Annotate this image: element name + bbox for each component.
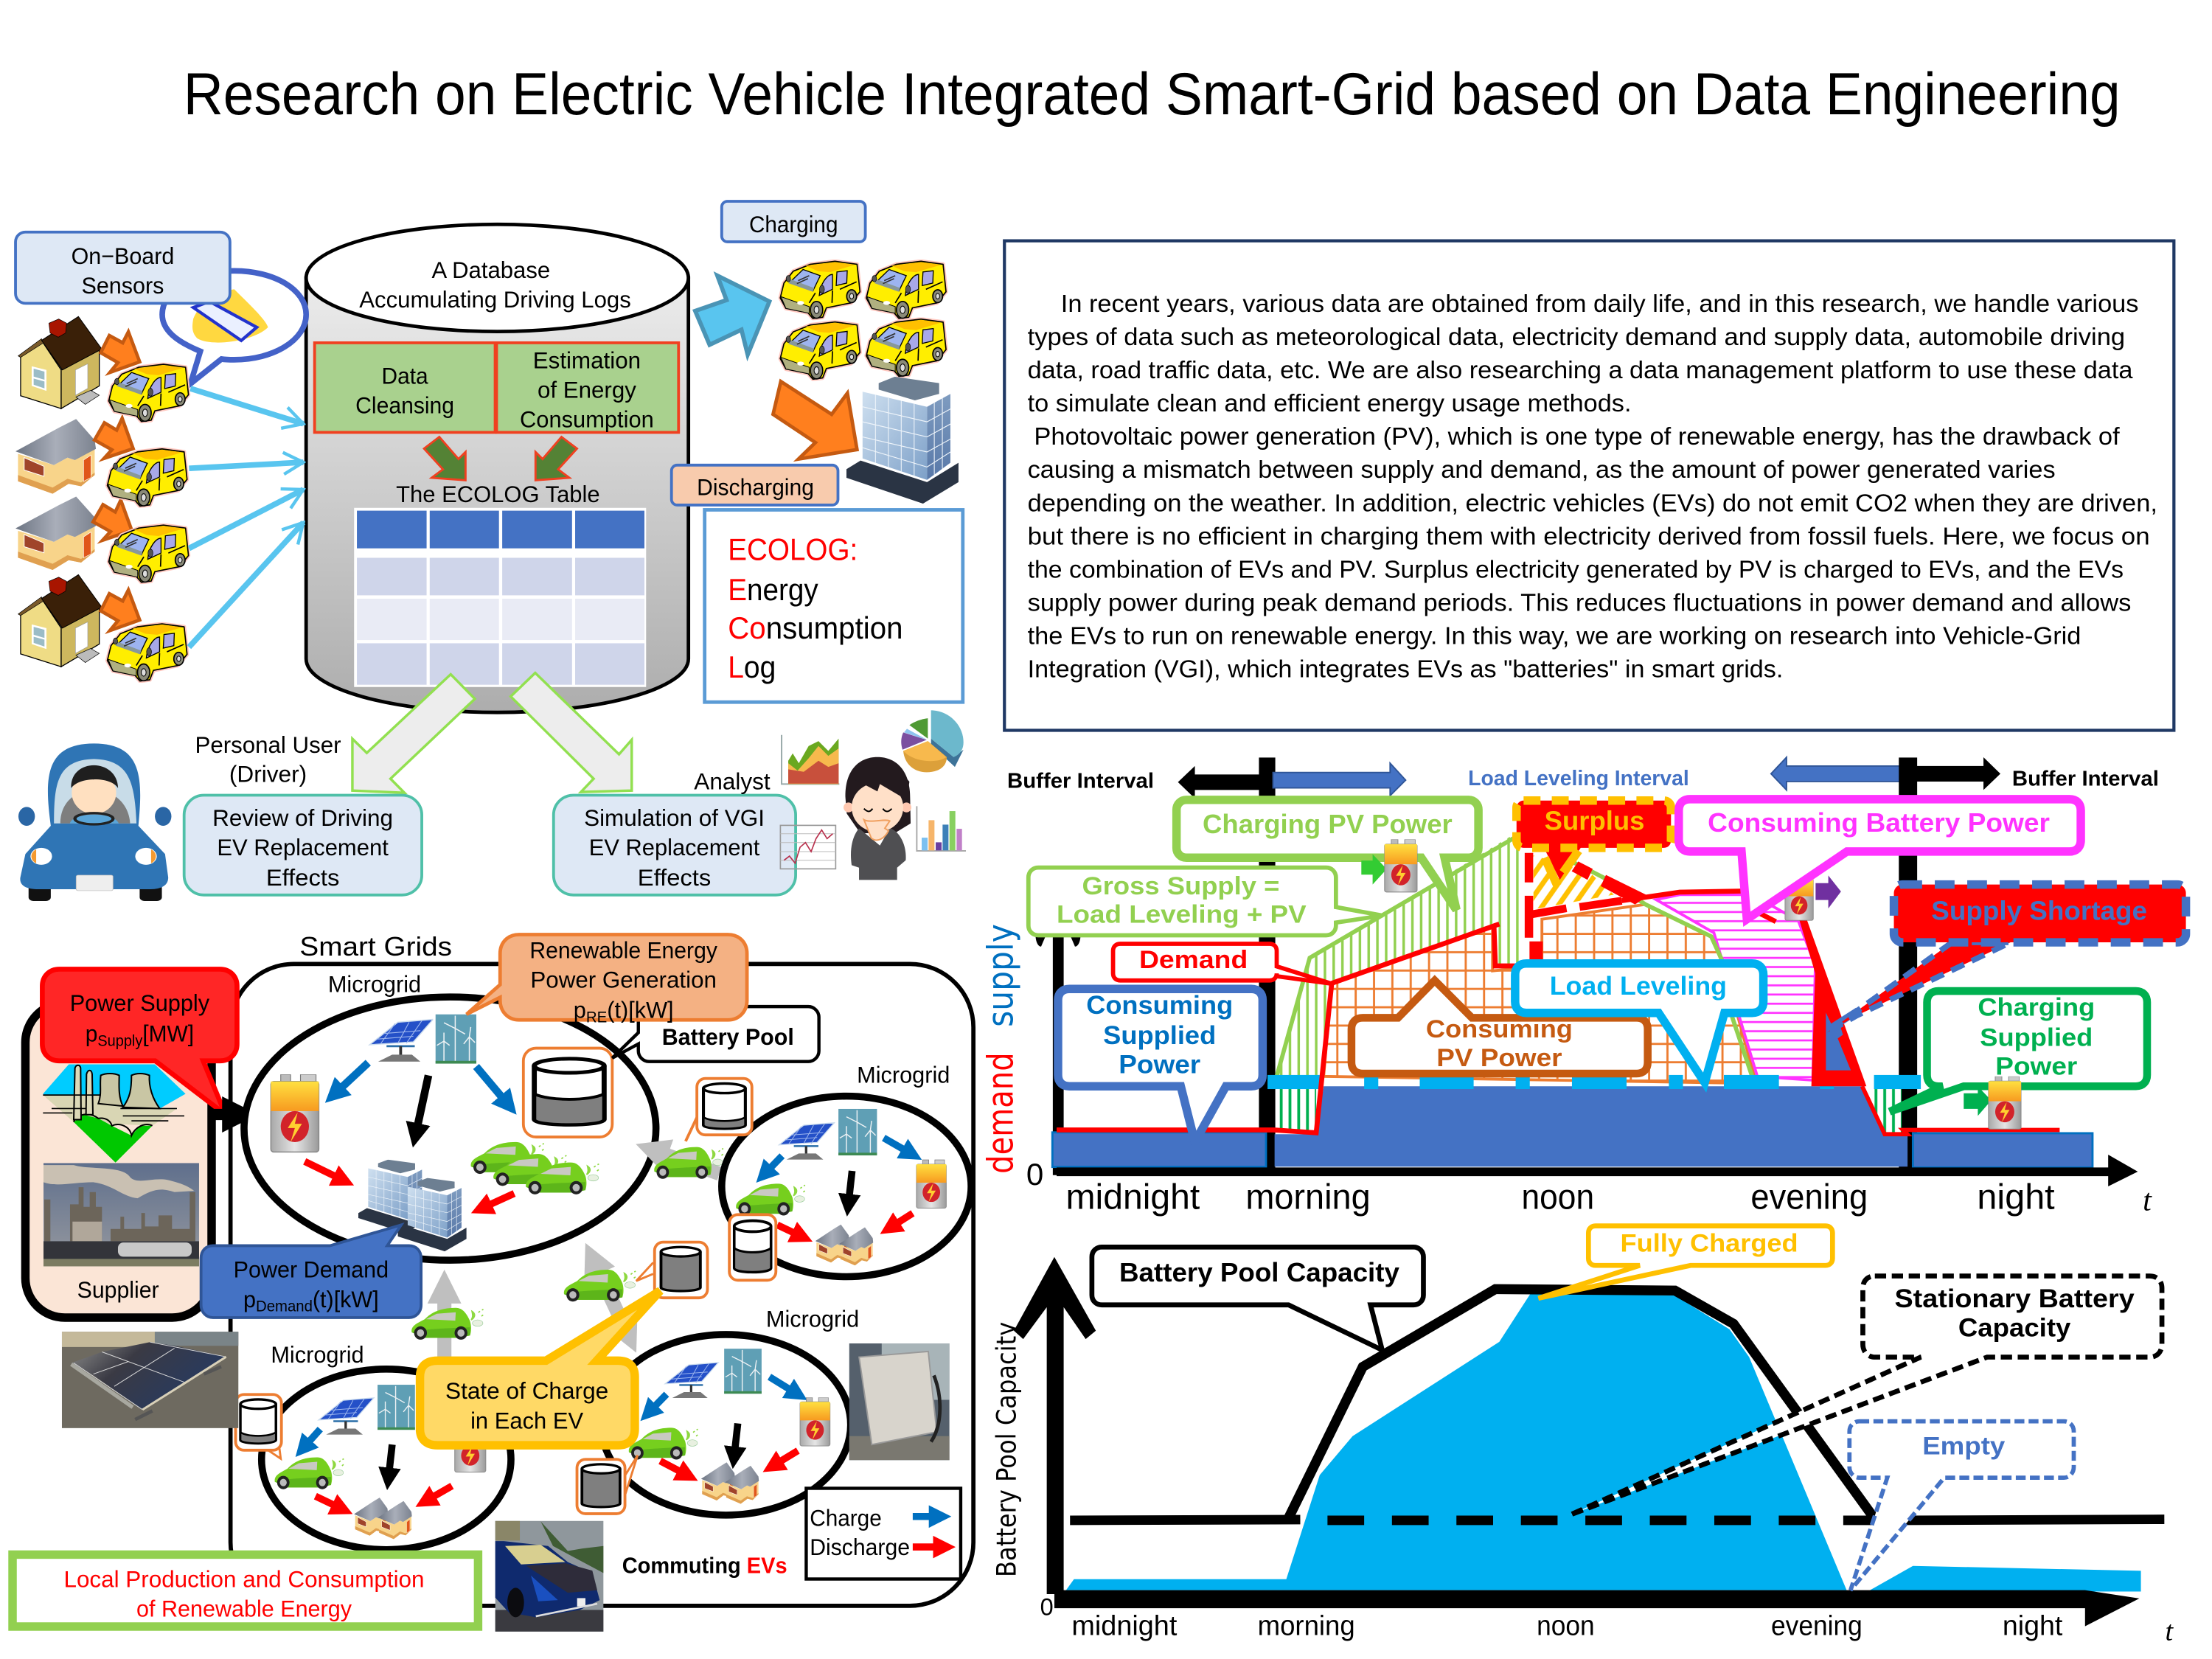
chart area: state of charge (1066, 1293, 2141, 1592)
box: estimation of energy consumption (496, 343, 678, 433)
callout: battery pool capacity (1092, 1247, 1423, 1350)
box: estimation of energy consumption: of Energy (538, 377, 636, 403)
icon: charging van 4 (866, 319, 946, 376)
axis tick labels: night (1977, 1178, 2055, 1217)
callout: stationary battery capacity: Stationary Battery (1895, 1284, 2135, 1313)
icon: commuting EV 3 (654, 1147, 723, 1179)
label: charging: Charging (749, 211, 838, 237)
panel: research summary: but there is no efficient in charging them with electricity derived from fossil fuels. Here, we focus on (1028, 523, 2150, 550)
callout: battery pool (612, 1006, 819, 1062)
photo: commuting EV (495, 1521, 603, 1632)
axis tick labels: noon (1537, 1610, 1595, 1641)
callout: charging supplied power: Charging (1978, 994, 2095, 1022)
axis tick labels (1026, 1157, 2152, 1218)
chart area: evening charging stripes (1870, 1089, 1902, 1133)
icon: house 4 (18, 574, 102, 667)
axis tick labels: evening (1771, 1610, 1863, 1641)
chart area: PV charging hatch (1277, 834, 1523, 1077)
chart area: morning charging stripes (1277, 1089, 1316, 1133)
axis tick labels: evening (1750, 1178, 1868, 1217)
icon: analyst woman (844, 757, 911, 880)
callout: surplus: Surplus (1545, 806, 1644, 836)
callout: supply shortage: Supply Shortage (1931, 895, 2147, 925)
panel: research summary: supply power during peak demand periods. This reduces fluctuations in power demand and allows (1028, 589, 2131, 616)
label: on-board sensors: Sensors (81, 272, 164, 299)
legend: charge and discharge: Discharge (810, 1534, 910, 1560)
label: discharging (672, 465, 838, 505)
arrow: commuting EV 2 path (593, 1259, 629, 1338)
callout: battery pool capacity: Battery Pool Capacity (1119, 1257, 1400, 1287)
panel: research summary: to simulate clean and efficient energy usage methods. (1028, 390, 1631, 417)
axis tick labels: t (2166, 1615, 2174, 1646)
legend box: ECOLOG definition: ECOLOG: (728, 532, 858, 567)
callout: charging supplied power: Power (1995, 1053, 2077, 1081)
icon: commuting EV 2 (564, 1270, 636, 1301)
icon: house 1 (18, 316, 102, 408)
callout: local production and consumption (13, 1554, 478, 1627)
callout: power demand: p (243, 1286, 257, 1312)
axis: horizontal (1054, 1590, 2139, 1627)
label: charging (722, 201, 866, 242)
callout: gross supply: Load Leveling + PV (1057, 900, 1307, 928)
callout: charging PV power: Charging PV Power (1203, 809, 1453, 839)
label: microgrid right: Microgrid (857, 1062, 950, 1088)
arrow: van 4 to database (189, 523, 303, 647)
photo: refinery (44, 1163, 199, 1266)
callout: demand (1113, 944, 1332, 984)
line: load leveling target (1267, 1075, 1921, 1089)
database cylinder (306, 224, 689, 712)
callout: renewable energy generation: p (574, 997, 586, 1023)
callout: renewable energy generation: Renewable Energy (529, 937, 717, 964)
label: commuting EVs: Commuting EVs (622, 1553, 787, 1578)
axis: vertical (1014, 1257, 1096, 1594)
callout: local production and consumption: Local Production and Consumption (63, 1565, 425, 1592)
callout: charging PV power (1177, 800, 1478, 910)
label: on-board sensors (15, 232, 230, 303)
axis: morning interval boundary (1259, 757, 1276, 1169)
label: microgrid bottom right: Microgrid (766, 1306, 859, 1332)
icon: charging van 2 (866, 261, 946, 319)
callout: state of charge: State of Charge (445, 1377, 608, 1404)
callout: gross supply (1029, 868, 1382, 935)
line: battery pool capacity (1289, 1289, 1874, 1518)
callout: load leveling (1515, 964, 1764, 1082)
label: personal user: Personal User (195, 731, 341, 758)
callout: local production and consumption: of Renewable Energy (136, 1596, 352, 1622)
callout: load leveling: Load Leveling (1550, 972, 1727, 1001)
box: review of driving (184, 796, 422, 895)
axis: horizontal (1057, 1155, 2138, 1186)
icon: battery charging from PV (1361, 839, 1417, 892)
arrow: morning load leveling interval (1273, 763, 1405, 796)
axis label: battery pool capacity: Battery Pool Capacity (991, 1322, 1023, 1577)
callout: charging supplied power (1890, 991, 2147, 1112)
axis tick labels: midnight (1065, 1178, 1200, 1217)
callout: gross supply: Gross Supply = (1082, 872, 1279, 900)
icon: van 3 (108, 525, 189, 582)
callout: consuming supplied power: Consuming (1086, 991, 1233, 1020)
callout: power supply (42, 969, 237, 1114)
box: data cleansing (315, 343, 495, 432)
legend: charge and discharge: Charge (810, 1504, 882, 1531)
callout: power supply: [MW] (142, 1020, 194, 1047)
arrow: van 1 to database (190, 389, 303, 424)
callout: empty: Empty (1922, 1432, 2005, 1460)
axis tick labels (1040, 1594, 2174, 1646)
box: estimation of energy consumption: Consumption (520, 406, 654, 433)
callout: charging supplied power: Supplied (1980, 1024, 2093, 1052)
callout: supply shortage (1826, 885, 2186, 1071)
panel: research summary: Photovoltaic power generation (PV), which is one type of renewable energy, has the drawback of (1034, 423, 2120, 451)
label: microgrid bottom left: Microgrid (271, 1341, 364, 1368)
callout: power demand: Power Demand (234, 1256, 389, 1283)
panel: smart grids diagram (13, 931, 973, 1632)
panel: research summary: depending on the weather. In addition, electric vehicles (EVs) do not emit CO2 when they are driven, (1028, 490, 2157, 517)
arrow: commuting EV 3 path (652, 1150, 720, 1174)
box: simulation of VGI (554, 796, 796, 895)
box: data cleansing: Data (382, 362, 428, 389)
panel: ECOLOG data flow (15, 201, 966, 901)
icon: house 2 (15, 419, 96, 494)
database cylinder: Accumulating Driving Logs (359, 286, 631, 313)
callout: power supply: p (86, 1020, 98, 1047)
panel: research summary: types of data such as meteorological data, electricity demand and supply data, automobile driving (1028, 324, 2125, 351)
icon: EV battery high bottom (577, 1455, 638, 1514)
label: on-board sensors: On−Board (72, 243, 174, 269)
box: simulation of VGI: EV Replacement (589, 834, 760, 860)
panel: research summary: the EVs to run on renewable energy. In this way, we are working on research into Vehicle-Grid (1028, 623, 2081, 650)
arrow: database to vans (695, 276, 769, 355)
callout: power supply: Power Supply (70, 990, 209, 1016)
label: analyst: Analyst (694, 768, 771, 794)
arrow: discharging to building (773, 381, 857, 459)
callout: stationary battery capacity: Capacity (1958, 1313, 2071, 1342)
title: Research on Electric Vehicle Integrated Smart-Grid based on Data Engineering (184, 61, 2121, 128)
axis tick labels: night (2003, 1610, 2063, 1641)
microgrid: main (244, 997, 656, 1260)
legend box: ECOLOG definition: Log (728, 650, 776, 684)
label: microgrid main: Microgrid (328, 971, 421, 998)
callout: stationary battery capacity (1570, 1276, 2162, 1515)
arrow: power supply to microgrid (209, 1111, 226, 1117)
panel: research summary: data, road traffic data, etc. We are also researching a data management platform to use these data (1028, 357, 2133, 384)
panel: research summary: In recent years, various data are obtained from daily life, and in this research, we handle various (1061, 291, 2139, 318)
callout: power demand: Demand (256, 1298, 313, 1315)
icon: EV battery low (686, 1079, 752, 1141)
callout: battery pool: Battery Pool (662, 1023, 794, 1050)
chart area: supplied power base (1275, 1086, 1907, 1166)
box: review of driving: EV Replacement (217, 834, 389, 860)
chart: supply and demand over the day (981, 757, 2186, 1218)
chart area: PV consumption grid (1324, 905, 1756, 1083)
callout: consuming PV power: PV Power (1436, 1044, 1562, 1072)
callout: renewable energy generation: RE (586, 1009, 607, 1026)
chart: battery pool capacity (991, 1226, 2174, 1646)
line: demand curve (1057, 853, 2059, 1134)
label: the ECOLOG table: The ECOLOG Table (396, 481, 600, 507)
icon: charging van 1 (780, 261, 860, 319)
arrow: to personal user (352, 675, 475, 793)
callout: surplus (1517, 801, 1671, 886)
axis tick labels: noon (1522, 1178, 1594, 1217)
frame: smart grids (231, 964, 973, 1606)
icon: office building (846, 377, 959, 504)
bar: midnight supplied power (1052, 1133, 1266, 1167)
callout: state of charge: in Each EV (470, 1407, 583, 1433)
label: supplier: Supplier (77, 1276, 159, 1303)
label: discharging: Discharging (697, 474, 814, 501)
chart area: battery consumption stripes (1656, 894, 1815, 1080)
axis: vertical (1035, 934, 1081, 1175)
callout: consuming PV power: Consuming (1426, 1015, 1573, 1043)
label: personal user (195, 731, 341, 787)
callout: renewable energy generation: (t)[kW] (607, 997, 674, 1023)
icon: battery charging at night (1964, 1077, 2021, 1129)
callout: consuming battery power: Consuming Battery Power (1708, 807, 2050, 838)
axis tick labels: t (2143, 1183, 2152, 1218)
icon: EV battery medium (729, 1214, 776, 1280)
icon: EV battery high top (636, 1242, 708, 1298)
legend: charge and discharge (806, 1488, 961, 1579)
panel: research summary: the combination of EVs and PV. Surplus electricity generated by PV is charged to EVs, and the EVs (1028, 556, 2124, 583)
callout: state of charge (420, 1291, 660, 1445)
callout: renewable energy generation: Power Generation (530, 966, 717, 992)
icon: bar chart (917, 806, 966, 851)
callout: power demand: (t)[kW] (313, 1286, 379, 1312)
arrow: cleansing to table (424, 437, 465, 480)
icon: commuting EV 1 (411, 1308, 484, 1340)
chart area: surplus hatch (1534, 855, 1614, 909)
axis tick labels: morning (1258, 1610, 1355, 1641)
label: load leveling interval: Load Leveling Interval (1468, 767, 1689, 790)
icon: driver in blue car (18, 743, 171, 901)
icon: EV battery low left (236, 1394, 282, 1458)
arrow: to analyst (511, 673, 632, 792)
icon: area chart (782, 735, 839, 784)
arrow: evening load leveling interval (1771, 757, 1905, 790)
box: data cleansing: Cleansing (355, 392, 454, 419)
arrow: left buffer interval (1178, 766, 1270, 799)
bar: night supplied power (1913, 1133, 2093, 1167)
line: gross supply (1277, 835, 1752, 1077)
callout: fully charged: Fully Charged (1621, 1230, 1798, 1258)
callout: consuming PV power (1352, 981, 1648, 1074)
axis label: demand: demand (981, 1052, 1022, 1174)
ECOLOG table (354, 508, 646, 687)
arrow: estimation to table (535, 437, 577, 480)
icon: battery discharging (1785, 874, 1841, 920)
arrow: house 1 to van (101, 332, 139, 372)
label: personal user: (Driver) (229, 761, 307, 787)
panel: research summary (1004, 241, 2174, 730)
axis label: supply: supply (981, 924, 1022, 1027)
icon: line chart (780, 825, 835, 869)
icon: van 1 (108, 364, 189, 422)
arrow: commuting EV 1 path (441, 1287, 448, 1357)
photo: stationary battery unit (849, 1343, 950, 1460)
callout: consuming battery power (1679, 799, 2081, 919)
icon: pie chart (901, 710, 964, 772)
legend box: ECOLOG definition: Consumption (728, 611, 902, 645)
legend box: ECOLOG definition: Energy (728, 572, 818, 607)
callout: power supply: Supply (97, 1032, 143, 1049)
callout: demand: Demand (1139, 946, 1248, 974)
arrow: house 2 to van (94, 418, 133, 459)
callout: power demand (201, 1225, 421, 1318)
icon: power plant (43, 1064, 186, 1163)
callout: fully charged (1538, 1226, 1832, 1298)
icon: house 3 (15, 496, 96, 570)
box: review of driving: Review of Driving (212, 804, 393, 831)
arrow: house 4 to van (101, 590, 139, 630)
axis tick labels: midnight (1071, 1610, 1178, 1641)
callout: consuming supplied power (1058, 989, 1262, 1142)
microgrid: bottom left (262, 1369, 511, 1550)
callout: renewable energy generation (467, 935, 747, 1026)
box: simulation of VGI: Effects (638, 864, 711, 891)
axis tick labels: 0 (1026, 1157, 1043, 1192)
box: estimation of energy consumption: Estimation (533, 347, 641, 373)
icon: charging van 3 (780, 322, 860, 379)
arrow: house 3 to van (93, 500, 132, 540)
arrow: van 2 to database (189, 462, 303, 468)
icon: van 2 (108, 449, 187, 506)
box: review of driving: Effects (266, 864, 339, 891)
panel: supplier (25, 1003, 212, 1318)
photo: solar panels (62, 1332, 238, 1428)
axis tick labels: morning (1245, 1178, 1371, 1217)
panel: research summary: Integration (VGI), which integrates EVs as "batteries" in smart grids. (1028, 656, 1783, 684)
arrow: van 3 to database (189, 490, 303, 549)
arrow: right buffer interval (1905, 757, 2000, 790)
axis tick labels: 0 (1040, 1594, 1054, 1621)
database cylinder: A Database (431, 257, 550, 283)
microgrid: right (722, 1096, 971, 1277)
label: buffer interval right: Buffer Interval (2012, 768, 2159, 791)
speech bubble: sensor (162, 271, 306, 383)
icon: van 4 (108, 624, 187, 681)
callout: consuming supplied power: Supplied (1103, 1021, 1216, 1050)
panel: research summary: causing a mismatch between supply and demand, as the amount of power generated varies (1028, 456, 2056, 484)
legend box: ECOLOG definition (705, 509, 963, 702)
label: buffer interval left: Buffer Interval (1007, 770, 1154, 793)
callout: consuming supplied power: Power (1119, 1050, 1200, 1079)
microgrid: bottom right (601, 1335, 851, 1515)
box: simulation of VGI: Simulation of VGI (584, 804, 765, 831)
axis: evening interval boundary (1899, 757, 1917, 1169)
heading: smart grids: Smart Grids (299, 931, 452, 961)
callout: empty (1849, 1422, 2073, 1590)
